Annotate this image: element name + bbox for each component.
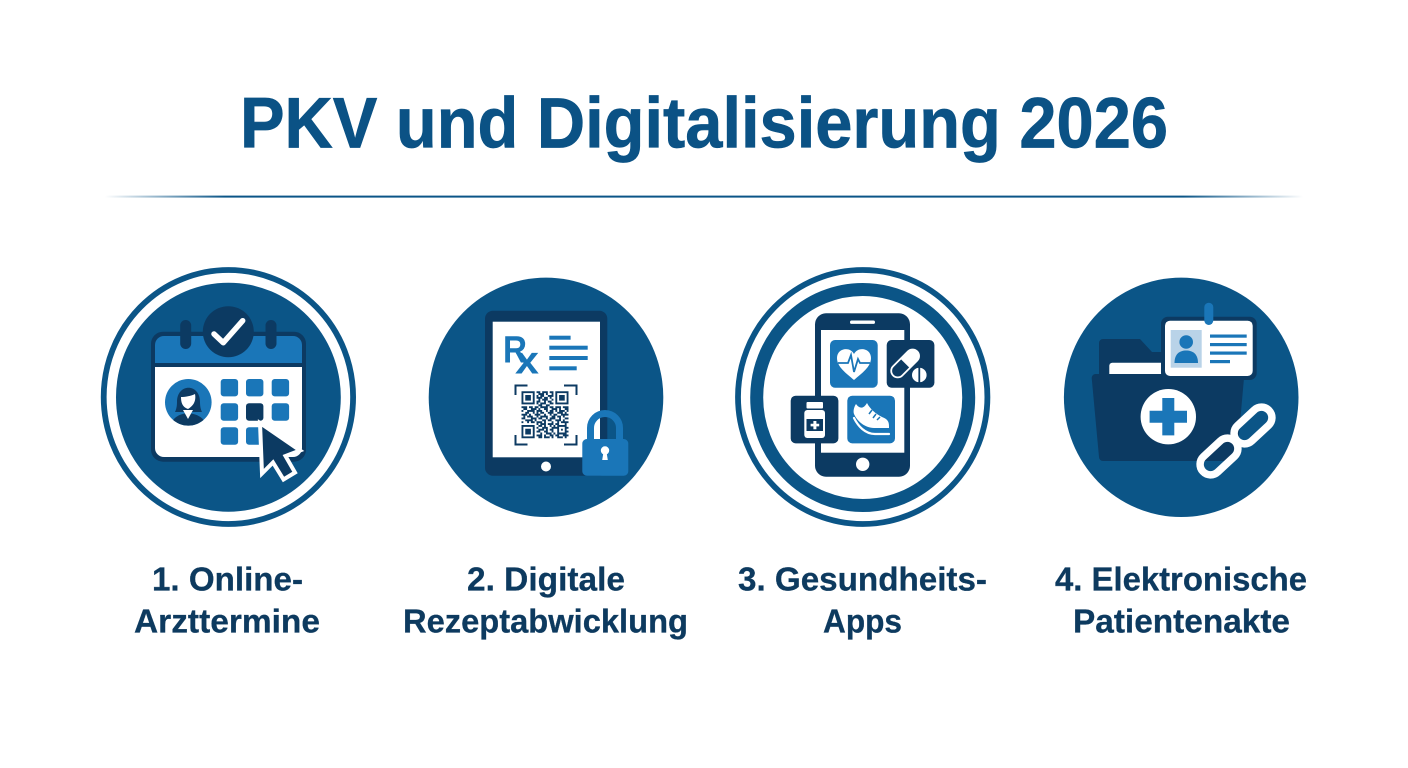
padlock	[582, 414, 628, 476]
label: Apps	[823, 603, 902, 640]
icon: medical folder with ID card and chain link	[1064, 278, 1298, 517]
label: 4. Elektronische	[1055, 562, 1307, 599]
ID card	[1161, 303, 1257, 380]
QR code	[516, 386, 576, 444]
label	[134, 562, 320, 640]
label: 3. Gesundheits-	[738, 562, 987, 599]
date grid	[221, 379, 289, 445]
label: 1. Online-	[152, 562, 303, 599]
icon: calendar with check and cursor	[104, 270, 353, 524]
panel: Digitale Rezeptabwicklung	[403, 278, 688, 640]
app: medicine bottle	[791, 396, 838, 443]
icon: tablet prescription with QR code and lock	[429, 278, 663, 517]
app: running shoe	[847, 396, 895, 443]
title: PKV und Digitalisierung 2026	[240, 85, 1168, 164]
Rx symbol	[503, 330, 539, 382]
icon: smartphone with health apps	[738, 270, 987, 524]
doctor avatar	[165, 379, 212, 428]
chain link	[1196, 403, 1276, 479]
app: pills	[887, 340, 934, 388]
infographic canvas	[100, 95, 1306, 640]
label: Patientenakte	[1073, 603, 1290, 640]
label	[403, 562, 688, 640]
label: 2. Digitale	[467, 562, 625, 599]
label: Rezeptabwicklung	[403, 603, 688, 640]
cursor arrow	[260, 423, 300, 480]
panel: Online-Arzttermine	[104, 270, 353, 640]
label	[738, 562, 987, 640]
label	[1055, 562, 1307, 640]
prescription lines	[549, 336, 588, 370]
panel: Gesundheits-Apps	[738, 270, 987, 640]
folder	[1092, 339, 1244, 461]
panel: Elektronische Patientenakte	[1055, 278, 1307, 640]
label: Arzttermine	[134, 603, 320, 640]
Rx symbol: R	[503, 330, 527, 372]
app: heart rate	[830, 340, 878, 388]
Rx symbol: x	[515, 340, 539, 382]
